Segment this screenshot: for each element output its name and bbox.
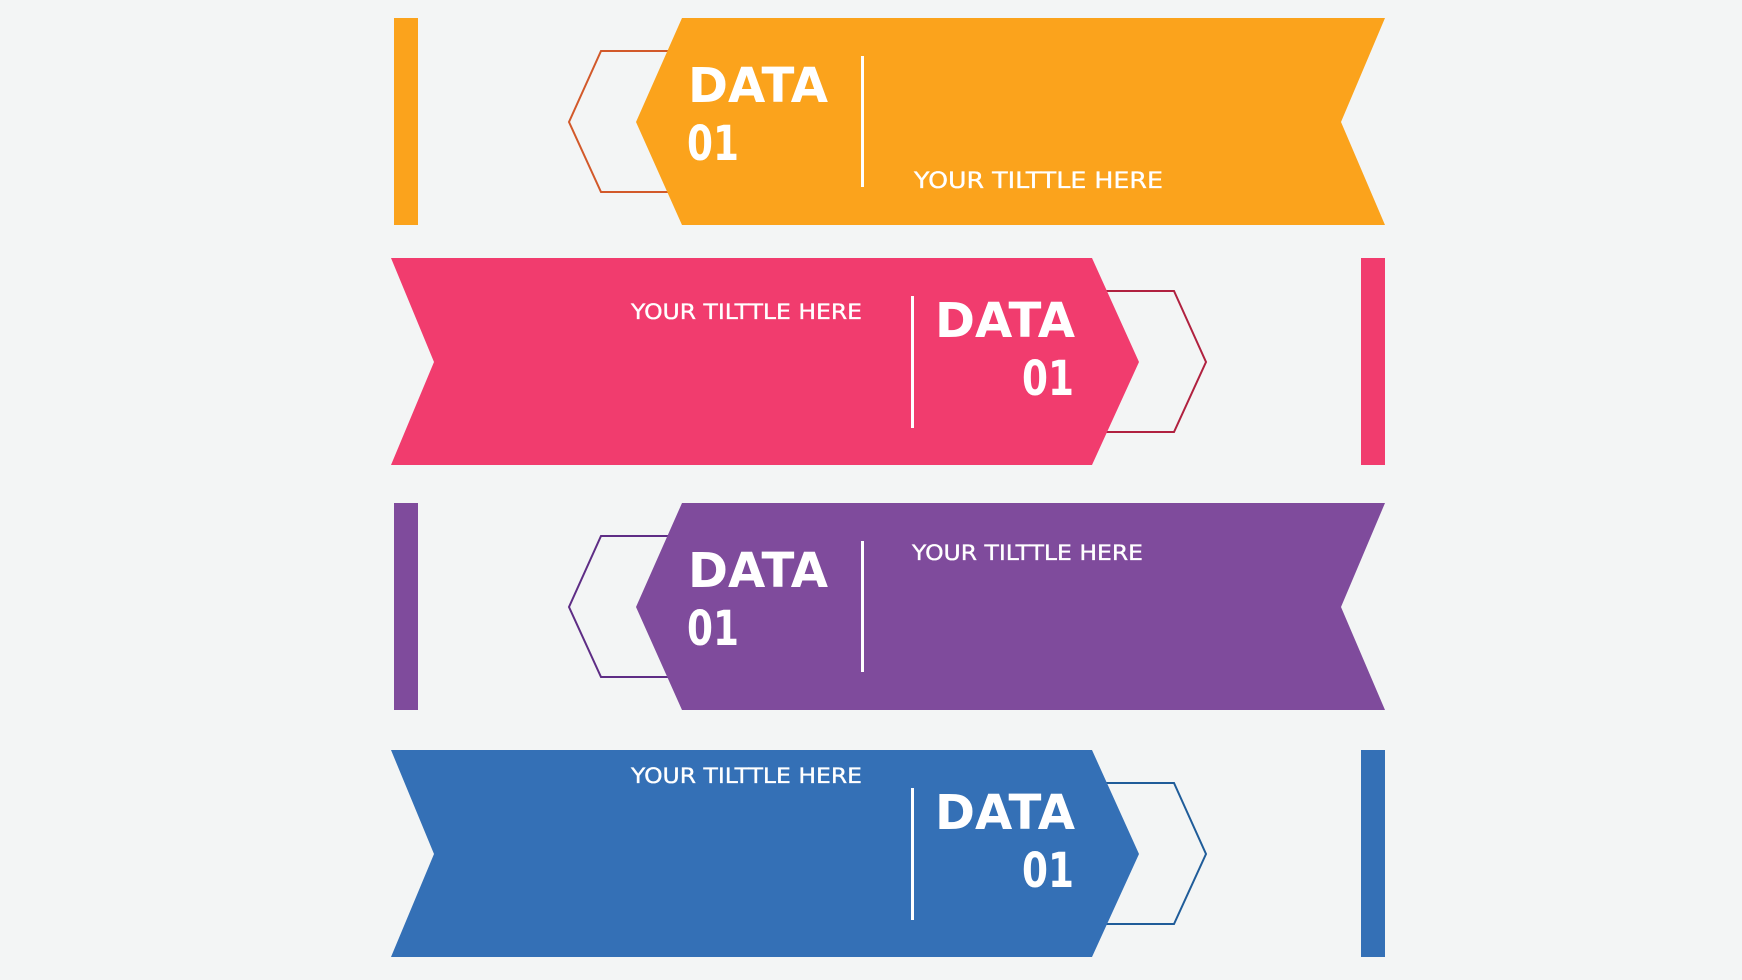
data label: orange: 01: [687, 116, 739, 172]
side bar: blue: [1361, 750, 1385, 957]
divider: purple: [861, 541, 864, 672]
panel: row 3 purple: [394, 503, 1385, 710]
outline hexagon: pink: [1106, 291, 1206, 432]
title: purple: YOUR TILTTLE HERE: [911, 541, 1143, 566]
data label: blue: DATA: [935, 785, 1075, 841]
outline hexagon: orange: [569, 51, 668, 192]
data label: orange: [687, 58, 828, 172]
panel: row 1 orange: [394, 18, 1385, 225]
divider: pink: [911, 296, 914, 428]
ribbon banner: blue: [391, 750, 1139, 957]
side bar: pink: [1361, 258, 1385, 465]
title: blue: YOUR TILTTLE HERE: [630, 764, 862, 789]
data label: blue: 01: [1022, 843, 1074, 899]
data label: orange: DATA: [688, 58, 828, 114]
divider: orange: [861, 56, 864, 187]
ribbon banner: pink: [391, 258, 1139, 465]
panel: row 2 pink: [391, 258, 1385, 465]
data label: purple: [687, 543, 828, 657]
outline hexagon: purple: [569, 536, 668, 677]
data label: blue: [935, 785, 1075, 899]
side bar: orange: [394, 18, 418, 225]
side bar: purple: [394, 503, 418, 710]
ribbon banner: purple: [636, 503, 1385, 710]
data label: purple: DATA: [688, 543, 828, 599]
data label: purple: 01: [687, 601, 739, 657]
ribbon banner: orange: [636, 18, 1385, 225]
outline hexagon: blue: [1106, 783, 1206, 924]
data label: pink: [935, 293, 1075, 407]
data label: pink: DATA: [935, 293, 1075, 349]
divider: blue: [911, 788, 914, 920]
panel: row 4 blue: [391, 750, 1385, 957]
title: pink: YOUR TILTTLE HERE: [630, 300, 862, 325]
data label: pink: 01: [1022, 351, 1074, 407]
title: orange: YOUR TILTTLE HERE: [913, 168, 1163, 194]
